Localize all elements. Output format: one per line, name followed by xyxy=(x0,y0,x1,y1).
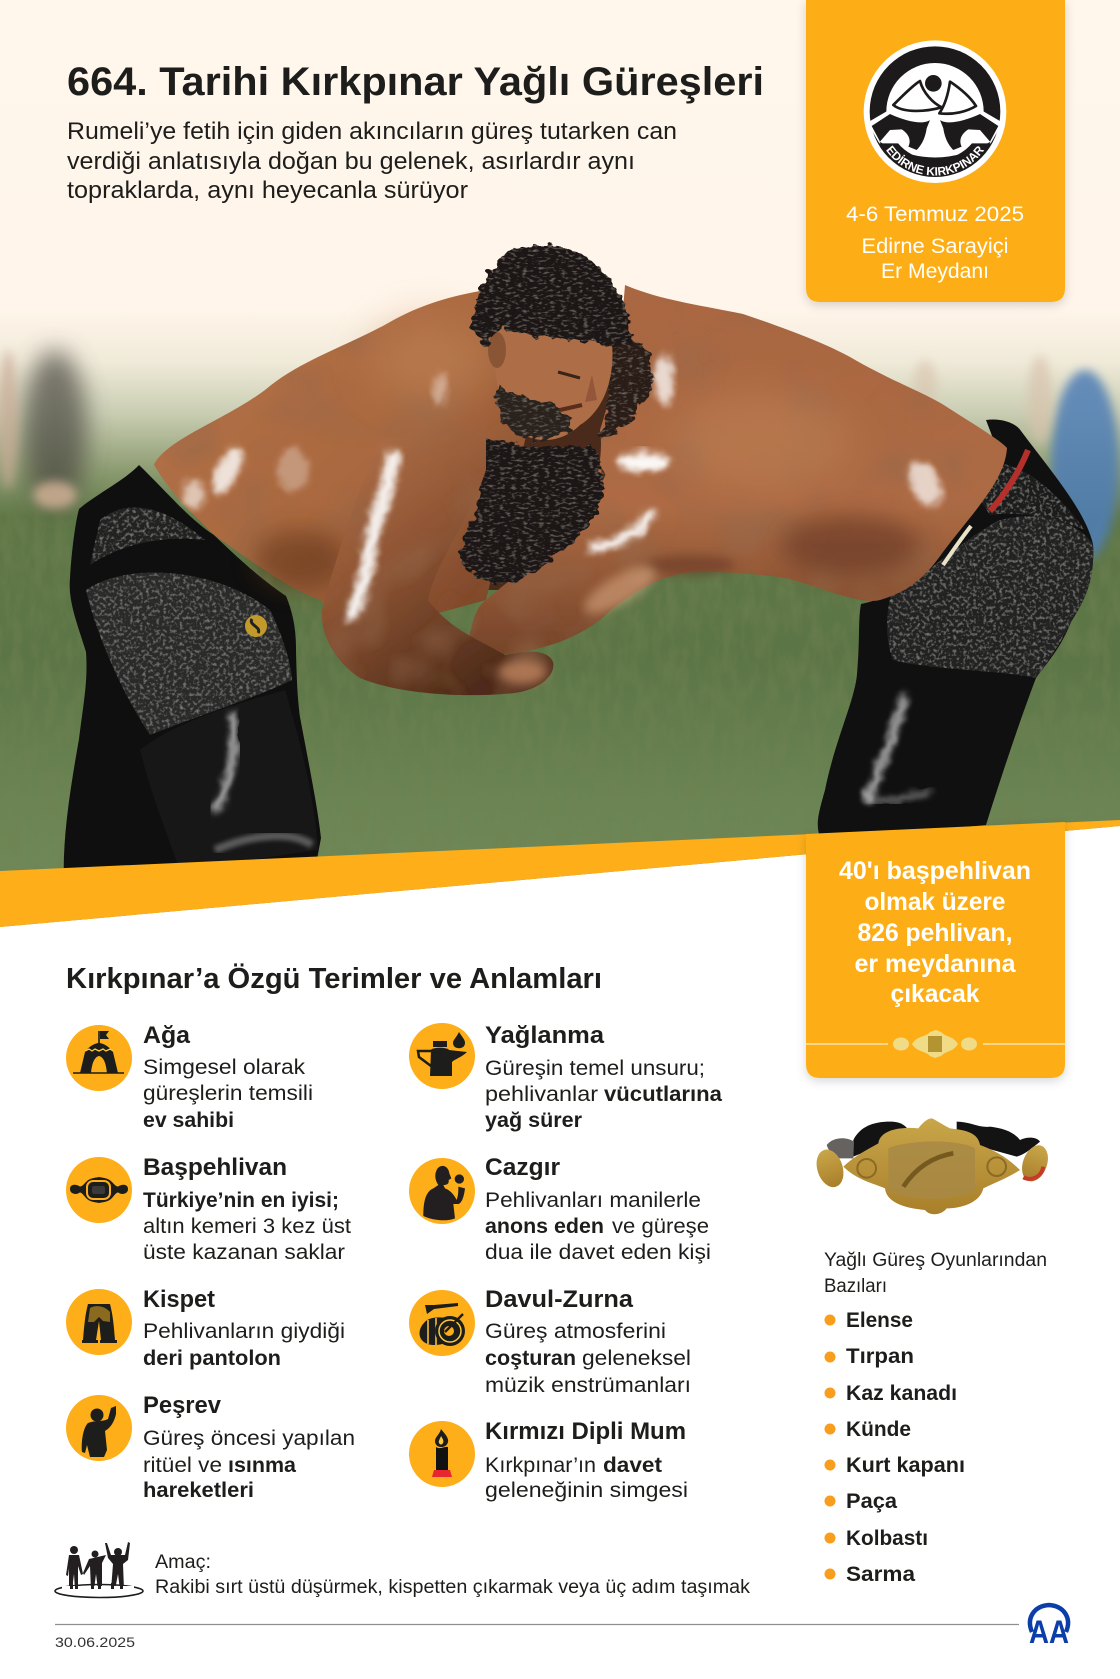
wrestler count text: olmak üzere xyxy=(864,888,1006,916)
icon: drum and zurna xyxy=(409,1290,475,1356)
term: Cazgır: ve güreşe xyxy=(612,1215,709,1238)
term: Yağlanma: pehlivanlar xyxy=(485,1083,598,1106)
icon: wrestler raising fist xyxy=(66,1395,132,1461)
term: Davul-Zurna: geleneksel xyxy=(582,1347,691,1370)
large gold belt xyxy=(812,1118,1053,1214)
term: Kırmızı Dipli Mum: Kırkpınar’ın xyxy=(485,1454,596,1477)
intro text: Rumeli’ye fetih için giden akıncıların güreş tutarken can xyxy=(67,118,677,145)
orange diagonal band xyxy=(0,820,1120,927)
list heading: Yağlı Güreş Oyunlarından xyxy=(824,1250,1047,1271)
term: Başpehlivan: üste kazanan saklar xyxy=(143,1241,345,1264)
term: Kispet xyxy=(66,1286,345,1370)
list items: Tırpan xyxy=(846,1345,914,1368)
icon: three wrestlers in a ring xyxy=(55,1542,143,1598)
intro text xyxy=(67,118,677,204)
term: Kırmızı Dipli Mum xyxy=(409,1418,688,1502)
background photo: wrestlers on grass xyxy=(0,0,1120,940)
term: Ağa: güreşlerin temsili xyxy=(143,1082,313,1105)
wrestler count text: 40'ı başpehlivan xyxy=(839,857,1031,885)
section heading: Kırkpınar’a Özgü Terimler ve Anlamları xyxy=(66,962,602,995)
blurred spectators xyxy=(0,350,1119,560)
goal note xyxy=(55,1542,751,1598)
term: Ağa xyxy=(66,1022,313,1132)
right wrestler pants xyxy=(818,419,1093,840)
long wet hair of right wrestler xyxy=(461,435,603,583)
term: Peşrev: ısınma xyxy=(228,1454,296,1477)
term: Kırmızı Dipli Mum: davet xyxy=(603,1454,662,1477)
event date: 4-6 Temmuz 2025 xyxy=(846,203,1024,226)
term: Yağlanma: Yağlanma xyxy=(485,1022,605,1049)
left wrestler arm xyxy=(322,420,553,695)
event place xyxy=(862,235,1008,283)
left wrestler torso xyxy=(154,290,530,640)
term: Başpehlivan xyxy=(66,1154,351,1264)
icon: leather trousers xyxy=(66,1289,132,1355)
term: Kırmızı Dipli Mum: Kırmızı Dipli Mum xyxy=(485,1418,686,1445)
term: Peşrev: Peşrev xyxy=(143,1392,222,1419)
term: Cazgır: Cazgır xyxy=(485,1154,560,1181)
panel: wrestler count xyxy=(806,822,1065,1078)
term: Peşrev: hareketleri xyxy=(143,1479,254,1502)
date: 30.06.2025 xyxy=(55,1634,135,1650)
icon: oil can xyxy=(409,1023,475,1089)
term: Cazgır: anons eden xyxy=(485,1215,604,1238)
shadow between the wrestlers xyxy=(450,335,660,590)
term: Ağa: Simgesel olarak xyxy=(143,1056,306,1079)
wrestler count text: çıkacak xyxy=(890,980,980,1008)
term: Yağlanma: yağ sürer xyxy=(485,1109,582,1132)
list heading: Bazıları xyxy=(824,1276,887,1297)
term: Cazgır xyxy=(409,1154,711,1264)
term: Yağlanma: vücutlarına xyxy=(604,1083,722,1106)
logo lettering: EDİRNE KIRKPINAR xyxy=(886,145,984,176)
list items: Kurt kapanı xyxy=(846,1454,965,1477)
term: Davul-Zurna: Güreş atmosferini xyxy=(485,1320,666,1343)
term: Davul-Zurna: coşturan xyxy=(485,1347,576,1370)
list items: Sarma xyxy=(846,1563,915,1586)
list items xyxy=(846,1309,965,1586)
goal text: Amaç: xyxy=(155,1552,211,1573)
term: Yağlanma: Güreşin temel unsuru; xyxy=(485,1057,705,1080)
event place: Er Meydanı xyxy=(881,260,989,283)
pants badge xyxy=(245,615,267,637)
term: Kırmızı Dipli Mum: geleneğinin simgesi xyxy=(485,1479,688,1502)
term: Kispet: deri pantolon xyxy=(143,1347,281,1370)
list items: Kaz kanadı xyxy=(846,1382,957,1405)
list heading xyxy=(824,1250,1047,1297)
term: Başpehlivan: altın kemeri 3 kez üst xyxy=(143,1215,351,1238)
term: Davul-Zurna: Davul-Zurna xyxy=(485,1286,634,1313)
wrestler count text: er meydanına xyxy=(854,950,1017,978)
left wrestler pants xyxy=(64,465,321,885)
wrestler count text: 826 pehlivan, xyxy=(858,919,1012,947)
term: Başpehlivan: Türkiye’nin en iyisi; xyxy=(143,1189,339,1212)
title: 664. Tarihi Kırkpınar Yağlı Güreşleri xyxy=(67,60,764,104)
term: Peşrev: ritüel ve xyxy=(143,1454,222,1477)
event place: Edirne Sarayiçi xyxy=(862,235,1008,258)
panel: event info xyxy=(802,0,1069,309)
goal text: Rakibi sırt üstü düşürmek, kispetten çıkarmak veya üç adım taşımak xyxy=(155,1577,751,1598)
small belt ornament xyxy=(893,1030,977,1058)
Kırkpınar logo xyxy=(864,40,1006,183)
term: Başpehlivan: Başpehlivan xyxy=(143,1154,287,1181)
icon: tent xyxy=(66,1025,132,1091)
term: Cazgır: Pehlivanları manilerle xyxy=(485,1189,701,1212)
white lower background xyxy=(0,826,1120,1679)
icon: red-based candle xyxy=(409,1421,475,1487)
term: Peşrev xyxy=(66,1392,355,1502)
term: Kispet: Kispet xyxy=(143,1286,215,1313)
list items: Künde xyxy=(846,1418,911,1441)
goal text xyxy=(155,1552,751,1598)
term: Ağa: ev sahibi xyxy=(143,1109,234,1132)
wrestler count text xyxy=(839,857,1031,1008)
term: Cazgır: dua ile davet eden kişi xyxy=(485,1241,711,1264)
list items: Paça xyxy=(846,1490,897,1513)
term: Ağa: Ağa xyxy=(143,1022,191,1049)
term: Yağlanma xyxy=(409,1022,722,1132)
term: Peşrev: Güreş öncesi yapılan xyxy=(143,1427,355,1450)
wrestlers' head xyxy=(471,245,654,441)
term: Kispet: Pehlivanların giydiği xyxy=(143,1320,345,1343)
arm highlights xyxy=(352,450,546,684)
intro text: verdiği anlatısıyla doğan bu gelenek, asırlardır aynı xyxy=(67,148,635,175)
term: Davul-Zurna xyxy=(409,1286,691,1397)
AA logo: AA xyxy=(1029,1614,1069,1650)
term: Davul-Zurna: müzik enstrümanları xyxy=(485,1374,691,1397)
intro text: topraklarda, aynı heyecanla sürüyor xyxy=(67,177,468,204)
list items: Kolbastı xyxy=(846,1527,928,1550)
list items: Elense xyxy=(846,1309,913,1332)
icon: champion belt xyxy=(66,1157,132,1223)
right wrestler torso and arm xyxy=(470,285,1007,655)
icon: announcer with microphone xyxy=(409,1158,475,1224)
list: wrestling moves xyxy=(824,1250,1047,1586)
